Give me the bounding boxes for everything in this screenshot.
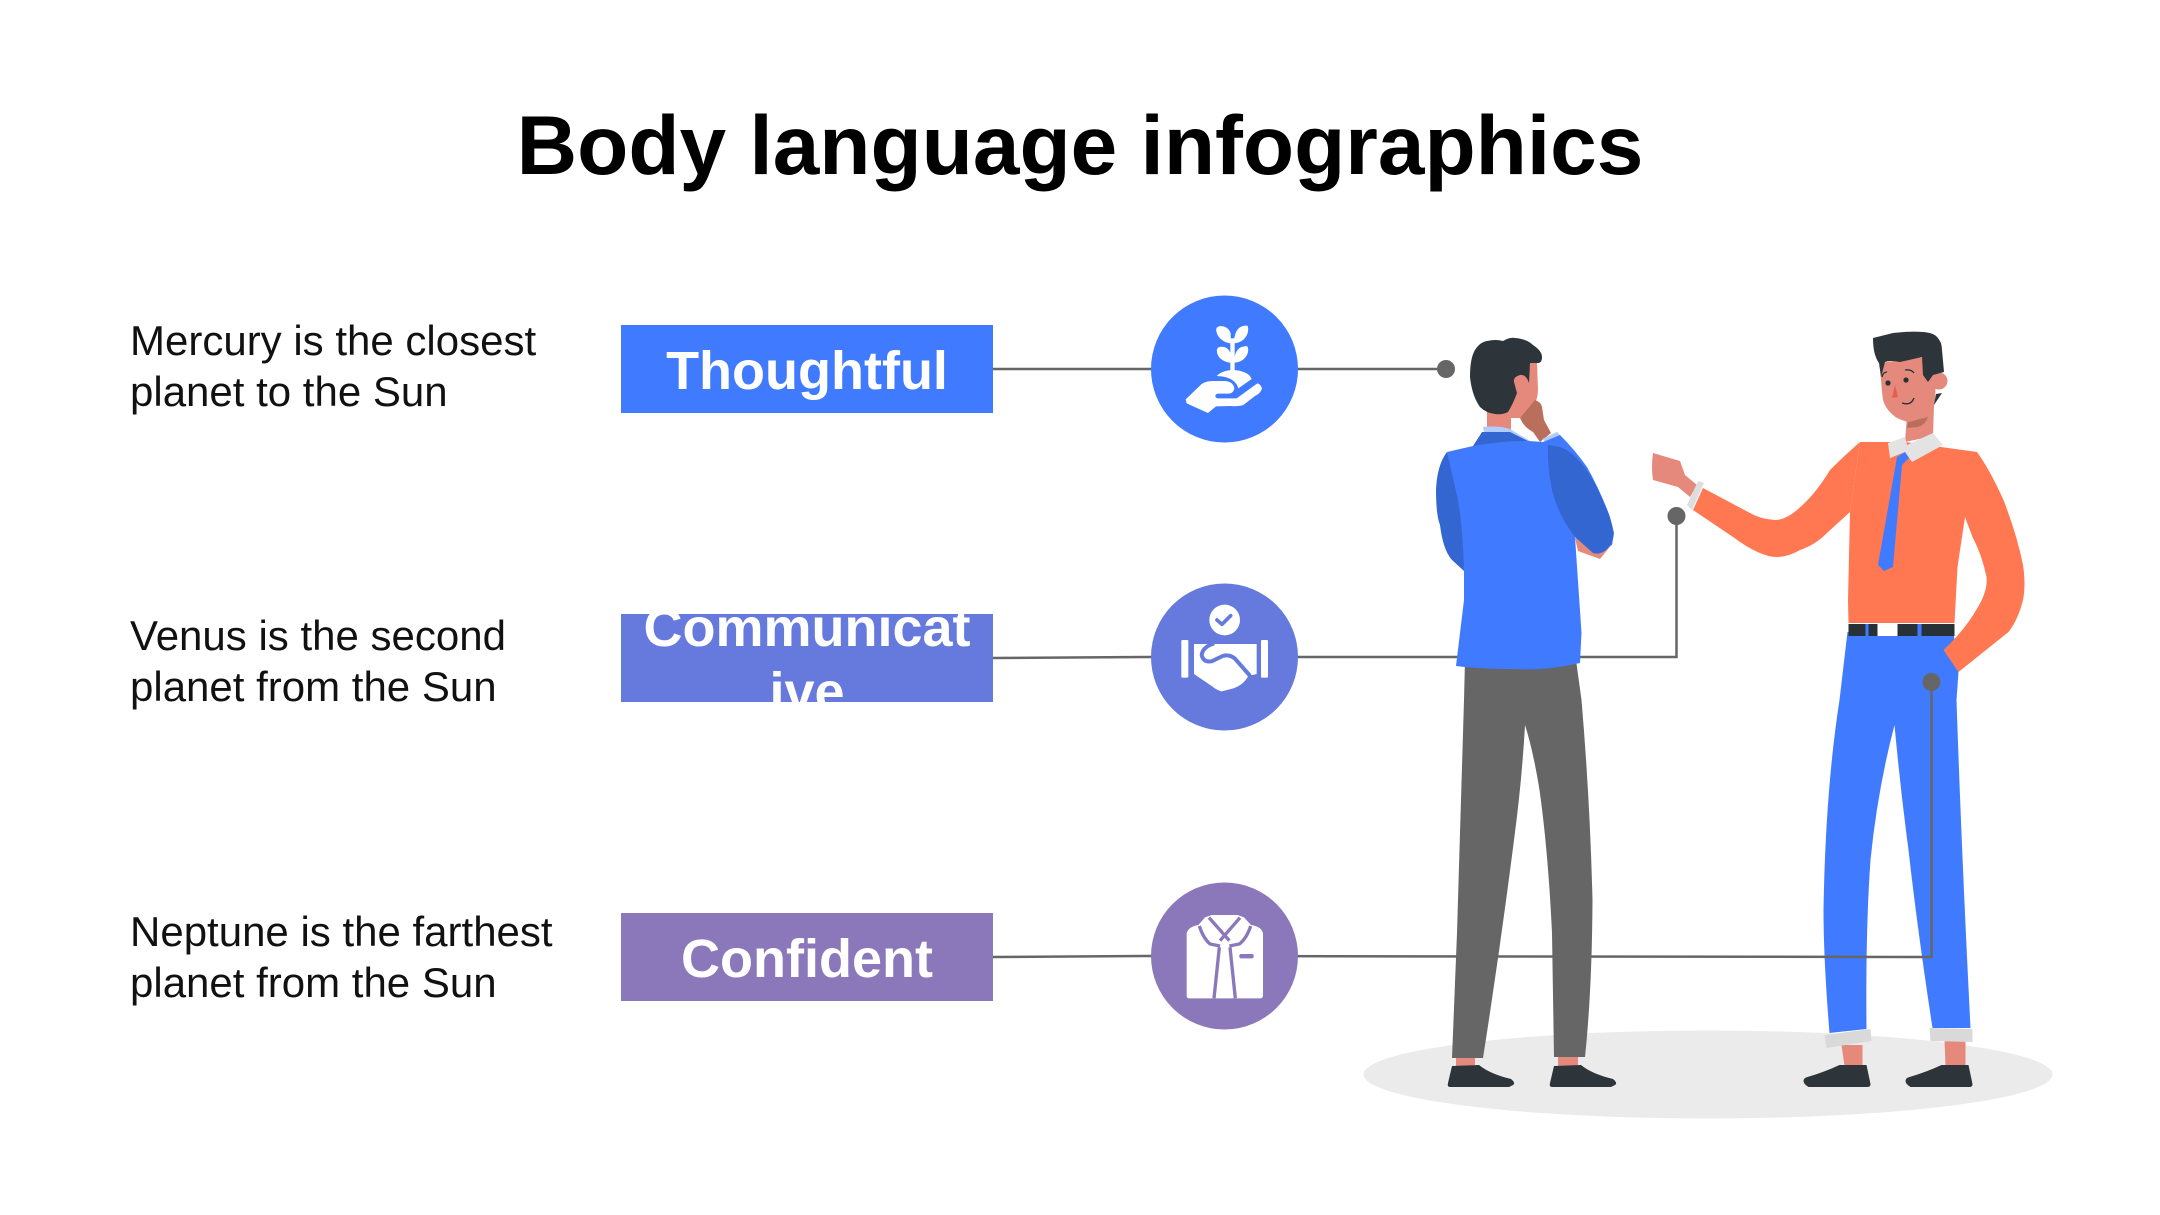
shirt and arm in pocket (1848, 442, 2024, 672)
connector: Thoughtful to head (993, 360, 1455, 378)
text: Neptune description: Neptune is the farthest (130, 908, 553, 955)
eyes (1885, 380, 1891, 386)
text: Venus description (130, 612, 506, 710)
text: Neptune description: planet from the Sun (130, 959, 497, 1006)
label: Thoughtful (621, 325, 993, 413)
neck (1905, 405, 1934, 442)
figure: thoughtful man (1436, 338, 1616, 1087)
shoes (1804, 1065, 1870, 1087)
socks (1456, 1057, 1578, 1068)
socks (1842, 1040, 1966, 1066)
text: Venus description: Venus is the second (130, 612, 506, 659)
label: Confident (621, 913, 993, 1001)
chin hand (1520, 400, 1551, 442)
label: Communicative (621, 614, 993, 702)
title: Body language infographics (517, 98, 1643, 192)
label: Confident: Confident (681, 929, 933, 989)
text: Venus description: planet from the Sun (130, 663, 497, 710)
ground shadow (1364, 1030, 2052, 1118)
lower body (1804, 624, 1972, 1087)
trousers (1452, 660, 1592, 1058)
tie (1878, 452, 1909, 571)
text: Mercury description: planet to the Sun (130, 368, 448, 415)
jacket sleeve right (1548, 445, 1614, 554)
face (1880, 357, 1936, 422)
icon: shirt and tie (1151, 882, 1298, 1030)
trouser cuffs (1824, 1028, 1972, 1048)
hair (1873, 332, 1944, 382)
raised arm (1693, 442, 1860, 557)
shirt cuff (1687, 481, 1704, 510)
lower hand (1575, 538, 1613, 559)
collar (1888, 433, 1943, 462)
label: Thoughtful: Thoughtful (666, 341, 948, 401)
icon: plant in hand (1151, 296, 1298, 442)
neck and face (1487, 358, 1538, 430)
lapel (1473, 432, 1530, 446)
text: Neptune description (130, 908, 553, 1006)
belt (1848, 624, 1954, 636)
connector: Confident to pocket (993, 673, 1940, 957)
hair (1470, 338, 1542, 414)
eyebrows and smile (1882, 370, 1914, 404)
trousers (1824, 632, 1970, 1033)
text: Mercury description (130, 317, 536, 415)
connector: Communicative to hand (993, 507, 1686, 658)
raised hand (1652, 453, 1697, 497)
shoes (1448, 1065, 1514, 1087)
jacket (1447, 435, 1614, 669)
nose (1892, 385, 1898, 398)
collar (1483, 426, 1530, 442)
jacket sleeve left (1436, 452, 1464, 571)
icon: handshake (1151, 584, 1298, 730)
text: Mercury description: Mercury is the closest (130, 317, 536, 364)
figure: presenting man (1652, 332, 2024, 1087)
